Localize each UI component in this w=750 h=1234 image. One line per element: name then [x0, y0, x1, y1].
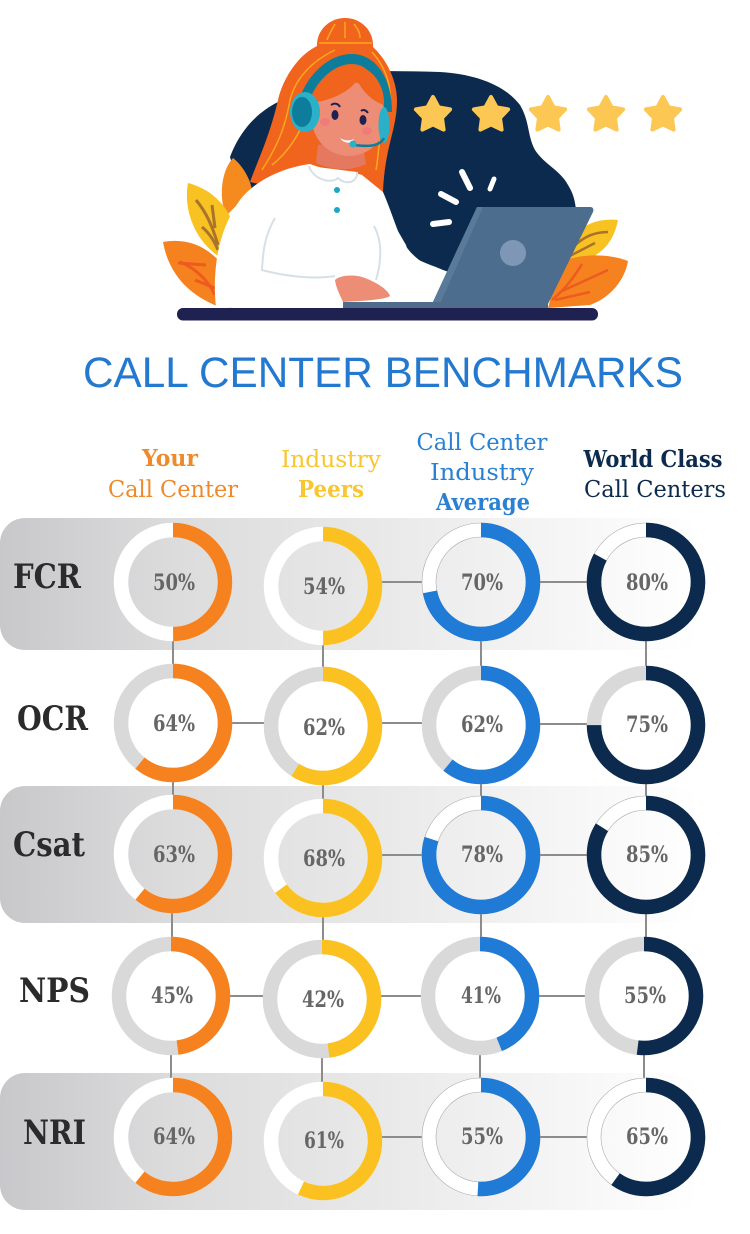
donut: NRI industry average 55%: 55% — [461, 1124, 503, 1150]
column heading: your call center: Call Center — [108, 477, 238, 503]
donut: OCR your call center 64%: 64% — [153, 711, 195, 737]
donut: NPS world class 55% — [592, 944, 696, 1048]
donut: NPS your call center 45% — [119, 944, 223, 1048]
column heading: call center industry average: Industry — [430, 460, 534, 486]
donut: Csat world class 85% — [587, 796, 705, 914]
collar and buttons — [309, 166, 357, 213]
donut: NRI your call center 64% — [121, 1085, 225, 1189]
fringe — [310, 65, 384, 108]
column heading: your call center — [108, 445, 238, 503]
row: NRI — [23, 1078, 705, 1196]
label: Csat: Csat — [13, 825, 85, 865]
donut: Csat your call center 63%: 63% — [153, 842, 195, 868]
donut: NRI industry peers 61%: 61% — [304, 1128, 344, 1154]
donut: NRI industry peers 61% — [271, 1089, 375, 1193]
donut: OCR industry peers 62% — [271, 674, 375, 778]
donut: NRI your call center 64%: 64% — [153, 1124, 195, 1150]
laptop — [343, 207, 593, 309]
donut: Csat industry average 78%: 78% — [461, 842, 503, 868]
donut: NPS industry average 41%: 41% — [461, 983, 501, 1009]
hair strands — [262, 22, 390, 170]
donut: FCR industry peers 54%: 54% — [303, 574, 345, 600]
column heading: call center industry average — [416, 430, 548, 516]
label: OCR: OCR — [17, 699, 89, 739]
donut: FCR industry average 70%: 70% — [461, 570, 503, 596]
label: NRI: NRI — [23, 1113, 86, 1153]
column heading: world class call centers — [583, 446, 726, 503]
column heading: call center industry average: Call Center — [416, 430, 548, 456]
hand — [335, 276, 390, 302]
column heading: your call center: Your — [141, 445, 199, 472]
donut: FCR world class 80% — [587, 523, 705, 641]
headband — [304, 59, 387, 112]
column heading: world class call centers: World Class — [583, 446, 722, 473]
donut: NPS industry peers 42%: 42% — [302, 987, 344, 1013]
face — [312, 82, 386, 156]
row: FCR — [13, 523, 705, 641]
donut: FCR industry average 70% — [422, 523, 540, 641]
icon: stars — [416, 97, 680, 130]
donut: Csat world class 85%: 85% — [626, 842, 668, 868]
donut: OCR industry peers 62%: 62% — [303, 715, 345, 741]
donut: Csat industry peers 68%: 68% — [303, 846, 345, 872]
donut: NRI industry average 55% — [422, 1078, 540, 1196]
column heading: industry peers: Peers — [298, 476, 364, 503]
hair bun — [317, 18, 373, 72]
title: CALL CENTER BENCHMARKS — [83, 349, 683, 397]
label: NPS: NPS — [19, 971, 90, 1011]
column heading: industry peers: Industry — [281, 447, 381, 473]
row: NPS — [19, 944, 696, 1051]
donut: OCR industry average 62% — [429, 673, 533, 777]
icon: sparks — [433, 172, 494, 224]
donut: OCR world class 75%: 75% — [626, 712, 668, 738]
donut: Csat industry peers 68% — [271, 806, 375, 910]
leaves right — [548, 220, 628, 308]
donut: FCR industry peers 54% — [271, 534, 375, 638]
donut: FCR your call center 50%: 50% — [153, 570, 195, 596]
donut: OCR your call center 64% — [121, 671, 225, 775]
donut: FCR your call center 50% — [121, 530, 225, 634]
row band: Csat — [0, 786, 700, 923]
donut: NRI world class 65% — [587, 1078, 705, 1196]
desk — [177, 308, 598, 320]
neck — [316, 140, 366, 169]
donut: OCR world class 75% — [594, 673, 698, 777]
row band: NRI — [0, 1073, 700, 1210]
column heading: call center industry average: Average — [435, 489, 530, 516]
donut: Csat industry average 78% — [422, 796, 540, 914]
donut: Csat your call center 63% — [121, 802, 225, 906]
row: Csat — [13, 796, 705, 914]
background blob — [230, 71, 576, 290]
column heading: world class call centers: Call Centers — [584, 477, 726, 503]
leaves left — [163, 158, 252, 308]
row band: FCR — [0, 518, 700, 650]
donut: NRI world class 65%: 65% — [626, 1124, 668, 1150]
donut: NPS world class 55%: 55% — [624, 983, 666, 1009]
illustration: call center agent at laptop — [163, 18, 680, 320]
donut: NPS industry average 41% — [428, 944, 532, 1048]
headset — [290, 92, 390, 148]
column heading: industry peers — [281, 447, 381, 503]
donut: FCR world class 80%: 80% — [626, 570, 668, 596]
label: FCR: FCR — [13, 557, 82, 597]
donut: NPS industry peers 42% — [270, 947, 374, 1051]
hair — [250, 43, 397, 200]
face features — [320, 104, 372, 143]
donut: OCR industry average 62%: 62% — [461, 712, 503, 738]
row: OCR — [17, 671, 698, 778]
sleeve folds — [262, 218, 380, 280]
body — [215, 164, 445, 308]
donut: NPS your call center 45%: 45% — [151, 983, 193, 1009]
connector lines — [171, 582, 646, 1137]
